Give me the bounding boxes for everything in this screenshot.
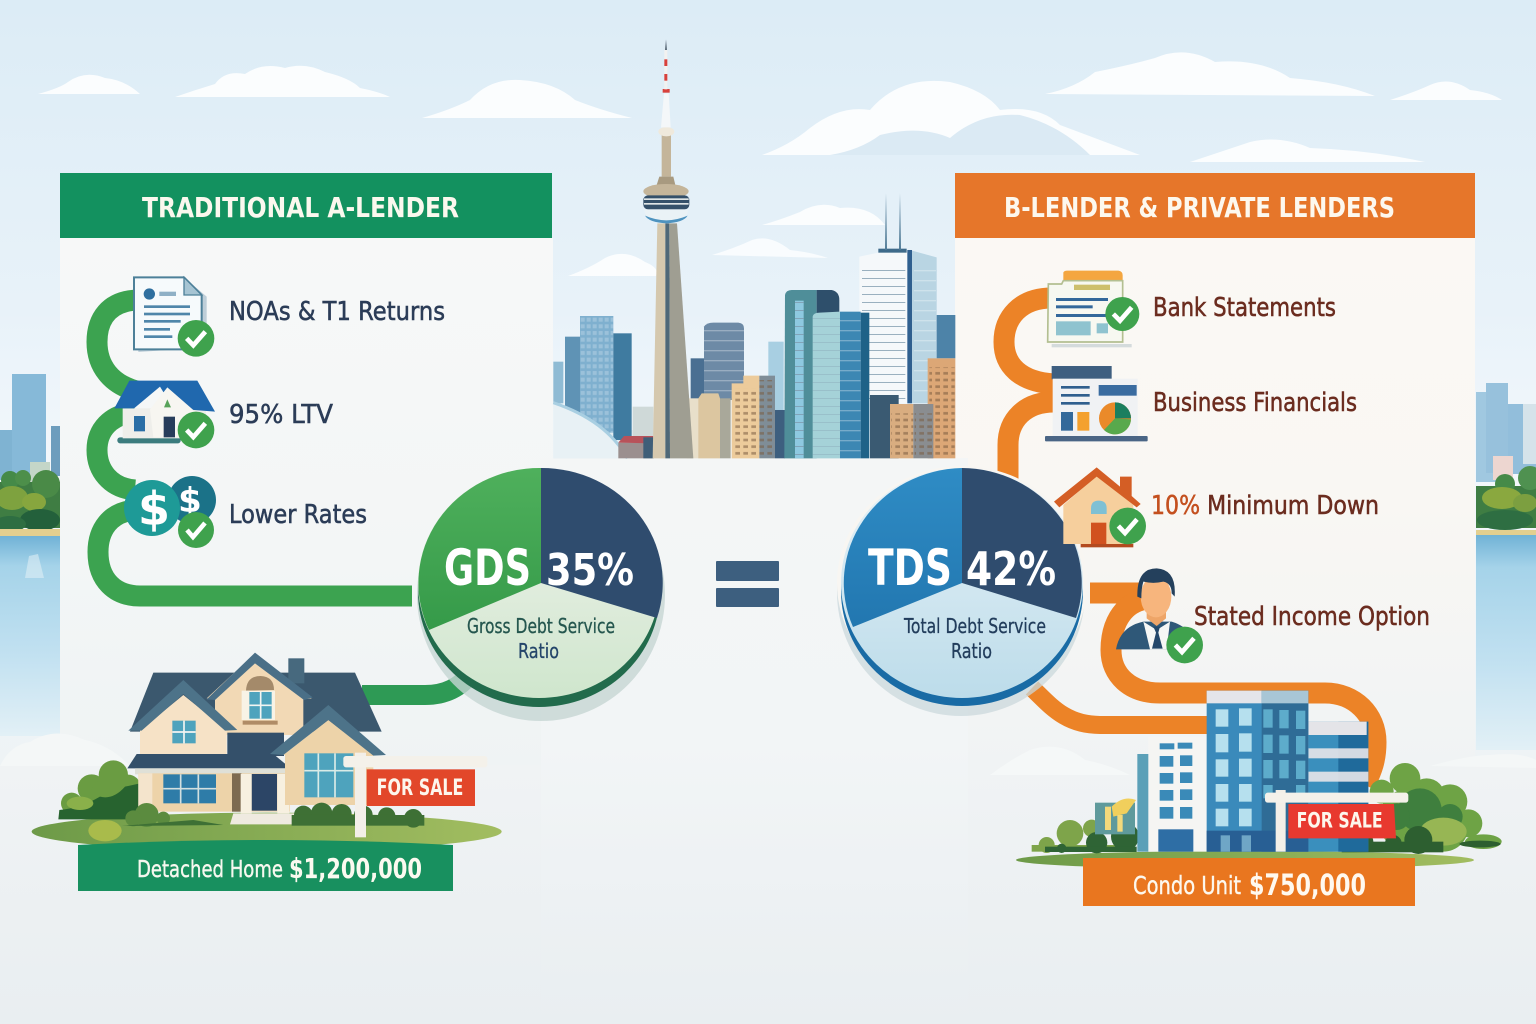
left tree line	[0, 470, 60, 532]
icon: dollar coins: $	[178, 481, 202, 521]
right distant skyline	[1476, 383, 1536, 482]
lower haze	[0, 733, 1536, 1024]
price tag: detached home: Detached Home	[137, 857, 283, 883]
icon: business financials	[1045, 366, 1148, 441]
GDS chart: GDS	[444, 539, 531, 597]
price tag: detached home	[78, 840, 453, 891]
left reflection	[2, 554, 44, 578]
header: traditional A-lender: TRADITIONAL A-LENDER	[142, 191, 459, 224]
illustration: detached home: FOR SALE	[377, 776, 463, 801]
right lake	[1476, 535, 1536, 750]
left margin scene: skyline, trees and lake	[0, 374, 60, 736]
price tag: condo unit: $750,000	[1249, 868, 1366, 902]
center backdrop	[540, 458, 968, 1024]
label: NOAs and T1 Returns: NOAs & T1 Returns	[229, 297, 445, 327]
right margin scene: skyline, trees and lake	[1476, 383, 1536, 750]
clouds	[38, 52, 1502, 276]
illustration: condo building	[1016, 691, 1502, 869]
green flow path	[97, 300, 412, 596]
icon: tax document	[134, 277, 214, 357]
right tree line	[1476, 466, 1536, 530]
GDS chart: Gross Debt Service	[467, 614, 615, 638]
TDS chart	[837, 466, 1087, 716]
GDS chart: Ratio	[518, 639, 559, 663]
panel: B-lender body	[955, 238, 1475, 770]
icon: dollar coins	[124, 476, 216, 548]
Toronto skyline	[553, 39, 955, 458]
TDS chart: TDS	[868, 539, 952, 597]
TDS chart: 42%	[966, 542, 1056, 596]
icon: house with LTV	[114, 381, 215, 448]
label: Bank Statements: Bank Statements	[1153, 293, 1336, 323]
illustration: detached home	[32, 653, 502, 851]
TDS chart: Total Debt Service	[903, 614, 1046, 638]
label: Business Financials: Business Financials	[1153, 388, 1357, 418]
header: traditional A-lender	[60, 173, 552, 238]
GDS chart: 35%	[546, 545, 634, 596]
connector: house to GDS	[362, 672, 472, 695]
CN Tower	[643, 39, 693, 458]
label: 95% LTV: 95% LTV	[229, 400, 333, 430]
label: Stated Income Option: Stated Income Option	[1194, 602, 1430, 632]
price tag: detached home: $1,200,000	[289, 852, 422, 885]
orange flow path	[1004, 298, 1376, 785]
label: Lower Rates: Lower Rates	[229, 500, 367, 530]
icon: dollar coins: $	[138, 482, 170, 536]
illustration: condo building: FOR SALE	[1297, 809, 1383, 834]
header: B-lender and private lenders: B-LENDER & PRIVATE LENDERS	[1004, 191, 1395, 224]
icon: businessman	[1116, 568, 1203, 663]
left lake	[0, 536, 60, 736]
label: 10% Minimum Down: 10% Minimum Down	[1151, 491, 1379, 521]
icon: small house	[1054, 467, 1146, 547]
left shoreline	[0, 529, 60, 536]
price tag: condo unit	[1083, 858, 1415, 906]
left distant skyline	[0, 374, 60, 482]
equals sign	[716, 561, 779, 607]
GDS chart	[417, 468, 665, 721]
panel: traditional A-lender body	[60, 238, 553, 770]
TDS chart: Ratio	[951, 639, 992, 663]
price tag: condo unit: Condo Unit	[1133, 871, 1241, 900]
right shoreline	[1476, 530, 1536, 535]
icon: bank statements	[1048, 271, 1139, 347]
header: B-lender and private lenders	[955, 173, 1475, 238]
